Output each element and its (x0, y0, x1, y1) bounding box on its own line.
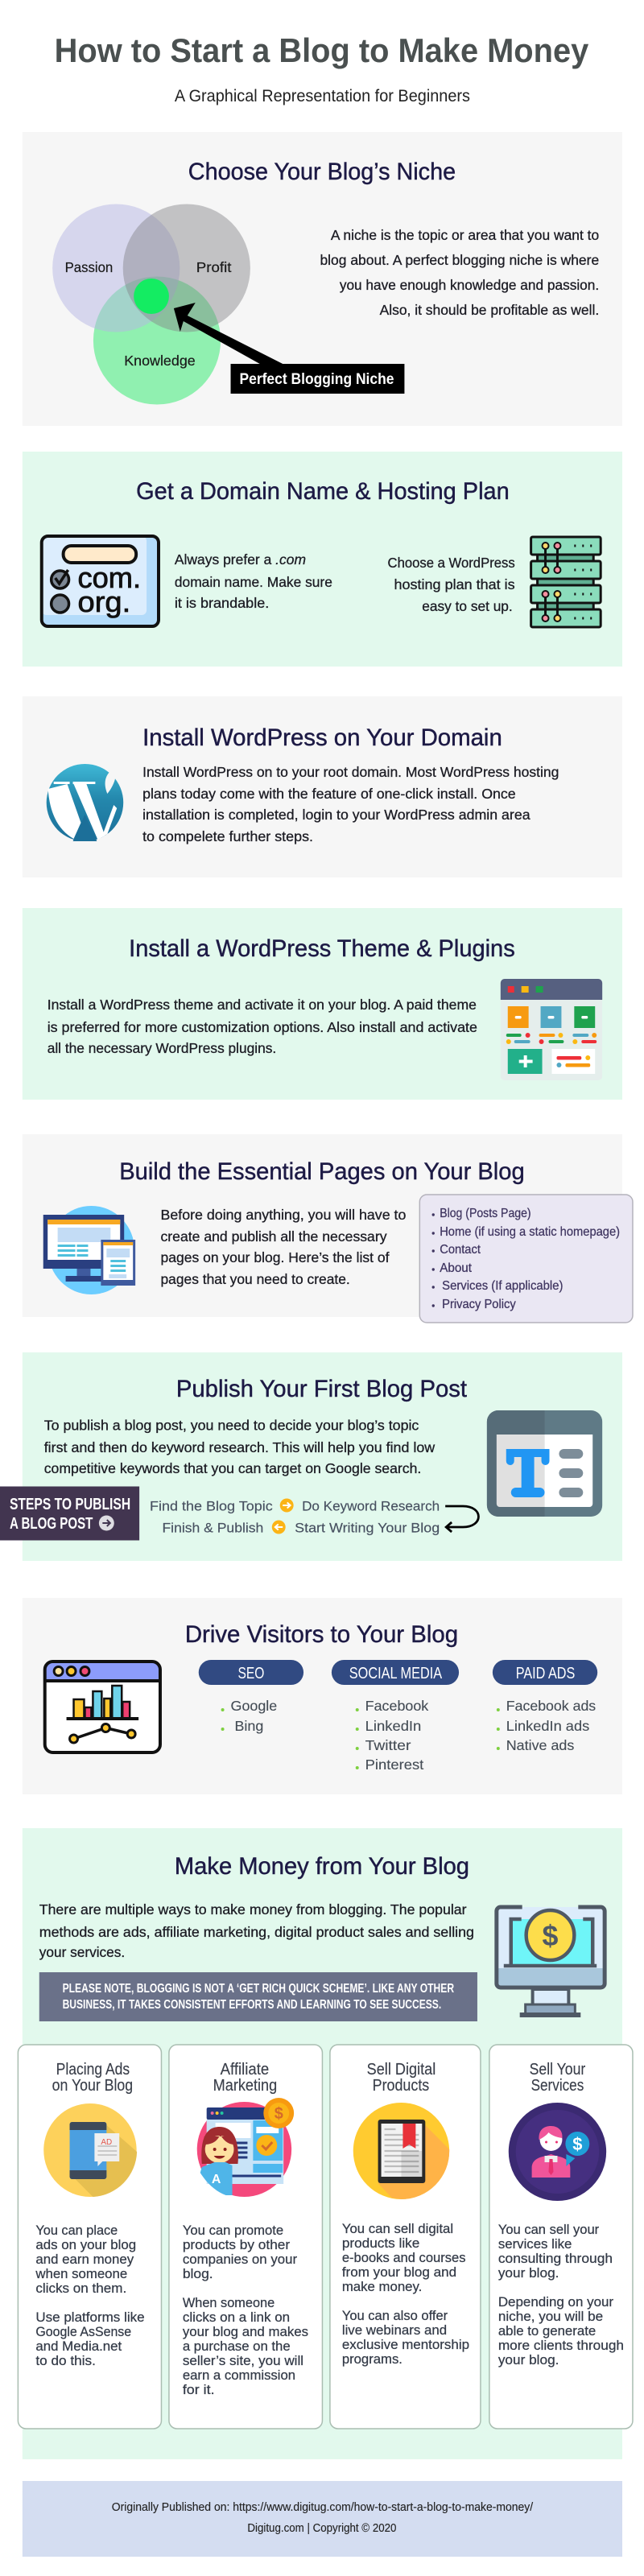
column: paid ads (493, 1660, 597, 1753)
card: list of pages: Blog (Posts Page) (440, 1207, 531, 1220)
card: list of pages: Contact (440, 1243, 481, 1257)
text: your services: consulting through (498, 2252, 613, 2266)
text: your services: able to generate (498, 2324, 596, 2339)
text: hosting tip (388, 555, 515, 614)
text: essential pages (160, 1207, 406, 1287)
text: digital products: e-books and courses (342, 2251, 466, 2265)
text: domain tip: it is brandable. (175, 595, 269, 611)
column: paid ads: LinkedIn ads (506, 1718, 590, 1734)
card: digital products: Sell Digital (367, 2061, 436, 2079)
icon: affiliate person: $ (275, 2105, 283, 2123)
column: seo: Bing (235, 1718, 263, 1734)
callout: steps to publish (0, 1486, 139, 1541)
icon: theme window (501, 979, 602, 1080)
card: your services (489, 2045, 633, 2429)
venn diagram: Passion (65, 259, 113, 275)
text: your services: your blog. (498, 2266, 559, 2281)
text: theme: Install a WordPress theme and activate it on your blog. A paid theme (47, 997, 477, 1013)
callout: steps to publish: STEPS TO PUBLISH (10, 1496, 130, 1513)
text: placing ads: to do this. (35, 2354, 96, 2368)
text: niche description: blog about. A perfect blogging niche is where (320, 252, 599, 268)
text: affiliate marketing: You can promote (183, 2223, 283, 2238)
text: affiliate marketing: your blog and makes (183, 2325, 308, 2339)
panel: domain and hosting (23, 452, 622, 667)
steps flow: Finish & Publish (162, 1520, 263, 1536)
venn diagram: Profit (196, 259, 232, 275)
text: affiliate marketing: blog. (183, 2267, 213, 2281)
callout: steps to publish: A BLOG POST (10, 1515, 93, 1533)
text: affiliate marketing: companies on your (183, 2252, 298, 2267)
card: placing ads (18, 2045, 161, 2429)
callout: please note (39, 1972, 477, 2021)
panel: essential pages (23, 1134, 633, 1323)
text: niche description (320, 227, 599, 318)
text: niche description: you have enough knowledge and passion. (340, 277, 599, 293)
text: affiliate marketing: clicks on a link on (183, 2310, 290, 2325)
text: placing ads: Google AsSense (35, 2325, 131, 2339)
text: affiliate marketing: earn a commission (183, 2368, 295, 2383)
text: make money: your services. (39, 1944, 125, 1960)
subtitle: A Graphical Representation for Beginners (175, 87, 470, 105)
card: digital products: Products (373, 2077, 429, 2095)
footer: Digitug.com | Copyright © 2020 (247, 2522, 396, 2535)
text: placing ads: and Media.net (35, 2339, 122, 2354)
text: affiliate marketing (183, 2223, 308, 2397)
text: placing ads (35, 2223, 145, 2368)
icon: arrow left (272, 1520, 286, 1534)
text: placing ads: Use platforms like (35, 2310, 145, 2325)
column: paid ads: Facebook ads (506, 1698, 596, 1714)
footer (23, 2481, 622, 2557)
heading: install wordpress: Install WordPress on Your Domain (142, 724, 502, 751)
steps flow: Start Writing Your Blog (295, 1520, 440, 1536)
text: your services: services like (498, 2237, 572, 2252)
text: essential pages: Before doing anything, you will have to (160, 1207, 406, 1223)
text: affiliate marketing: for it. (183, 2383, 215, 2397)
column: social media: LinkedIn (365, 1718, 421, 1734)
panel: drive visitors (23, 1598, 622, 1794)
text: affiliate marketing: products by other (183, 2238, 291, 2252)
heading: make money: Make Money from Your Blog (175, 1853, 469, 1880)
column: paid ads: Native ads (506, 1737, 575, 1753)
text: make money: methods are ads, affiliate marketing, digital product sales and selling (39, 1924, 474, 1940)
text: digital products: exclusive mentorship (342, 2338, 469, 2352)
column: social media: Twitter (365, 1737, 411, 1753)
icon: text editor (487, 1410, 602, 1517)
text: domain tip (175, 551, 332, 611)
heading: essential pages: Build the Essential Pages on Your Blog (119, 1158, 525, 1185)
column: social media: Pinterest (365, 1757, 423, 1773)
panel: first blog post (0, 1352, 622, 1561)
text: digital products: live webinars and (342, 2323, 447, 2338)
icon: ebook tablet (353, 2103, 449, 2199)
heading: theme: Install a WordPress Theme & Plugins (129, 935, 515, 962)
icon: server rack (531, 537, 601, 627)
text: digital products: make money. (342, 2280, 422, 2294)
icon: domain names (42, 536, 159, 626)
text: first blog post: To publish a blog post, you need to decide your blog’s topic (44, 1417, 419, 1434)
text: theme (47, 997, 477, 1056)
card: your services: Services (531, 2077, 584, 2095)
column: social media: Facebook (365, 1698, 429, 1714)
venn diagram: Knowledge (124, 353, 196, 369)
icon: monitor with coin (497, 1907, 605, 2017)
heading: drive visitors: Drive Visitors to Your Blog (185, 1621, 458, 1648)
text: digital products: You can sell digital (342, 2222, 453, 2236)
icon: phone ad: AD (101, 2138, 112, 2147)
steps flow: Find the Blog Topic (150, 1498, 273, 1514)
column: seo: SEO (237, 1665, 264, 1682)
text: placing ads: when someone (35, 2267, 127, 2281)
callout: perfect blogging niche: Perfect Blogging Niche (239, 371, 394, 388)
text: first blog post: competitive keywords that you can target on Google search. (44, 1460, 421, 1476)
icon: domain names: com. (78, 562, 141, 594)
card: list of pages: Privacy Policy (442, 1298, 516, 1311)
icon: arrow right (280, 1499, 294, 1512)
callout: please note: BUSINESS, IT TAKES CONSISTENT EFFORTS AND LEARNING TO SEE SUCCESS. (63, 1998, 441, 2012)
card: digital products (330, 2045, 481, 2429)
column: social media: SOCIAL MEDIA (349, 1665, 443, 1682)
text: digital products: products like (342, 2236, 419, 2251)
text: digital products: programs. (342, 2352, 402, 2367)
text: essential pages: pages on your blog. Here’s the list of (160, 1249, 390, 1265)
callout: perfect blogging niche (231, 364, 404, 394)
text: first blog post (44, 1417, 436, 1476)
text: install wordpress: plans today come with the feature of one-click install. Once (142, 786, 516, 802)
text: domain tip: domain name. Make sure (175, 574, 332, 590)
text: theme: all the necessary WordPress plugins. (47, 1040, 276, 1056)
card: list of pages: Home (if using a static homepage) (440, 1225, 620, 1239)
text: placing ads: You can place (35, 2223, 118, 2238)
icon: devices (43, 1206, 135, 1294)
icon: consultant: $ (572, 2134, 582, 2154)
text: install wordpress: to compelete further steps. (142, 828, 313, 844)
card: placing ads: Placing Ads (56, 2061, 130, 2079)
icon: consultant (509, 2103, 606, 2201)
column: seo: Google (231, 1698, 277, 1714)
column: social media (332, 1660, 459, 1773)
icon: analytics window (45, 1662, 160, 1752)
text: placing ads: clicks on them. (35, 2281, 126, 2296)
text: digital products (342, 2222, 469, 2367)
icon: affiliate person (197, 2098, 294, 2197)
card: placing ads: on Your Blog (52, 2077, 133, 2095)
text: your services: your blog. (498, 2353, 559, 2368)
text: essential pages: pages that you need to create. (160, 1271, 350, 1287)
text: affiliate marketing: a purchase on the (183, 2339, 291, 2354)
icon: affiliate person: A (212, 2173, 221, 2186)
text: install wordpress: installation is completed, login to your WordPress admin area (142, 807, 530, 823)
arrow: curved return (445, 1506, 478, 1532)
text: niche description: A niche is the topic or area that you want to (331, 227, 599, 243)
text: essential pages: create and publish all the necessary (160, 1228, 387, 1245)
text: hosting tip: easy to set up. (422, 598, 513, 614)
text: install wordpress: Install WordPress on to your root domain. Most WordPress hosting (142, 764, 559, 780)
text: first blog post: first and then do keyword research. This will help you find low (44, 1439, 436, 1455)
text: your services (498, 2223, 624, 2368)
panel: make money (18, 1828, 633, 2459)
heading: niche: Choose Your Blog’s Niche (188, 159, 456, 185)
card: affiliate marketing: Affiliate (221, 2061, 269, 2079)
text: placing ads: ads on your blog (35, 2238, 136, 2252)
title: How to Start a Blog to Make Money (55, 31, 589, 69)
panel: install wordpress (23, 696, 622, 877)
card: list of pages (419, 1195, 633, 1323)
text: placing ads: and earn money (35, 2252, 134, 2267)
arrow to perfect niche (174, 303, 286, 365)
text: your services: You can sell your (498, 2223, 600, 2237)
text: affiliate marketing: seller’s site, you will (183, 2354, 303, 2368)
text: domain tip: Always prefer a .com (175, 551, 306, 568)
card: affiliate marketing: Marketing (213, 2077, 277, 2095)
card: affiliate marketing (169, 2045, 322, 2429)
panel: choose your blog's niche (23, 132, 622, 426)
callout: please note: PLEASE NOTE, BLOGGING IS NOT A ‘GET RICH QUICK SCHEME’. LIKE ANY OTHER (63, 1982, 454, 1996)
heading: domain: Get a Domain Name & Hosting Plan (136, 478, 510, 505)
heading: first blog post: Publish Your First Blog Post (176, 1376, 468, 1402)
text: your services: niche, you will be (498, 2310, 603, 2324)
icon: domain names: org. (78, 586, 130, 618)
text: hosting tip: hosting plan that is (394, 576, 515, 592)
venn diagram (52, 204, 250, 404)
card: your services: Sell Your (530, 2061, 586, 2079)
text: make money: There are multiple ways to make money from blogging. The popular (39, 1901, 467, 1918)
text: affiliate marketing: When someone (183, 2296, 275, 2310)
steps flow (150, 1498, 478, 1536)
column: seo (199, 1660, 303, 1734)
text: niche description: Also, it should be profitable as well. (380, 302, 599, 318)
card: list of pages: About (440, 1261, 473, 1275)
text: install wordpress (142, 764, 559, 844)
steps flow: Do Keyword Research (302, 1498, 440, 1514)
text: digital products: You can also offer (342, 2309, 448, 2323)
footer: Originally Published on: https://www.digitug.com/how-to-start-a-blog-to-make-money/ (112, 2501, 534, 2514)
text: your services: more clients through (498, 2339, 624, 2353)
icon: monitor with coin: $ (543, 1920, 558, 1952)
text: make money (39, 1901, 474, 1960)
panel: theme and plugins (23, 908, 622, 1100)
card: list of pages: Services (If applicable) (442, 1279, 563, 1293)
text: hosting tip: Choose a WordPress (388, 555, 515, 571)
text: digital products: from your blog and (342, 2265, 456, 2280)
text: theme: is preferred for more customization options. Also install and activate (47, 1019, 477, 1035)
text: your services: Depending on your (498, 2295, 614, 2310)
icon: phone ad (43, 2103, 137, 2197)
icon: wordpress logo (47, 764, 123, 841)
column: paid ads: PAID ADS (516, 1665, 575, 1682)
